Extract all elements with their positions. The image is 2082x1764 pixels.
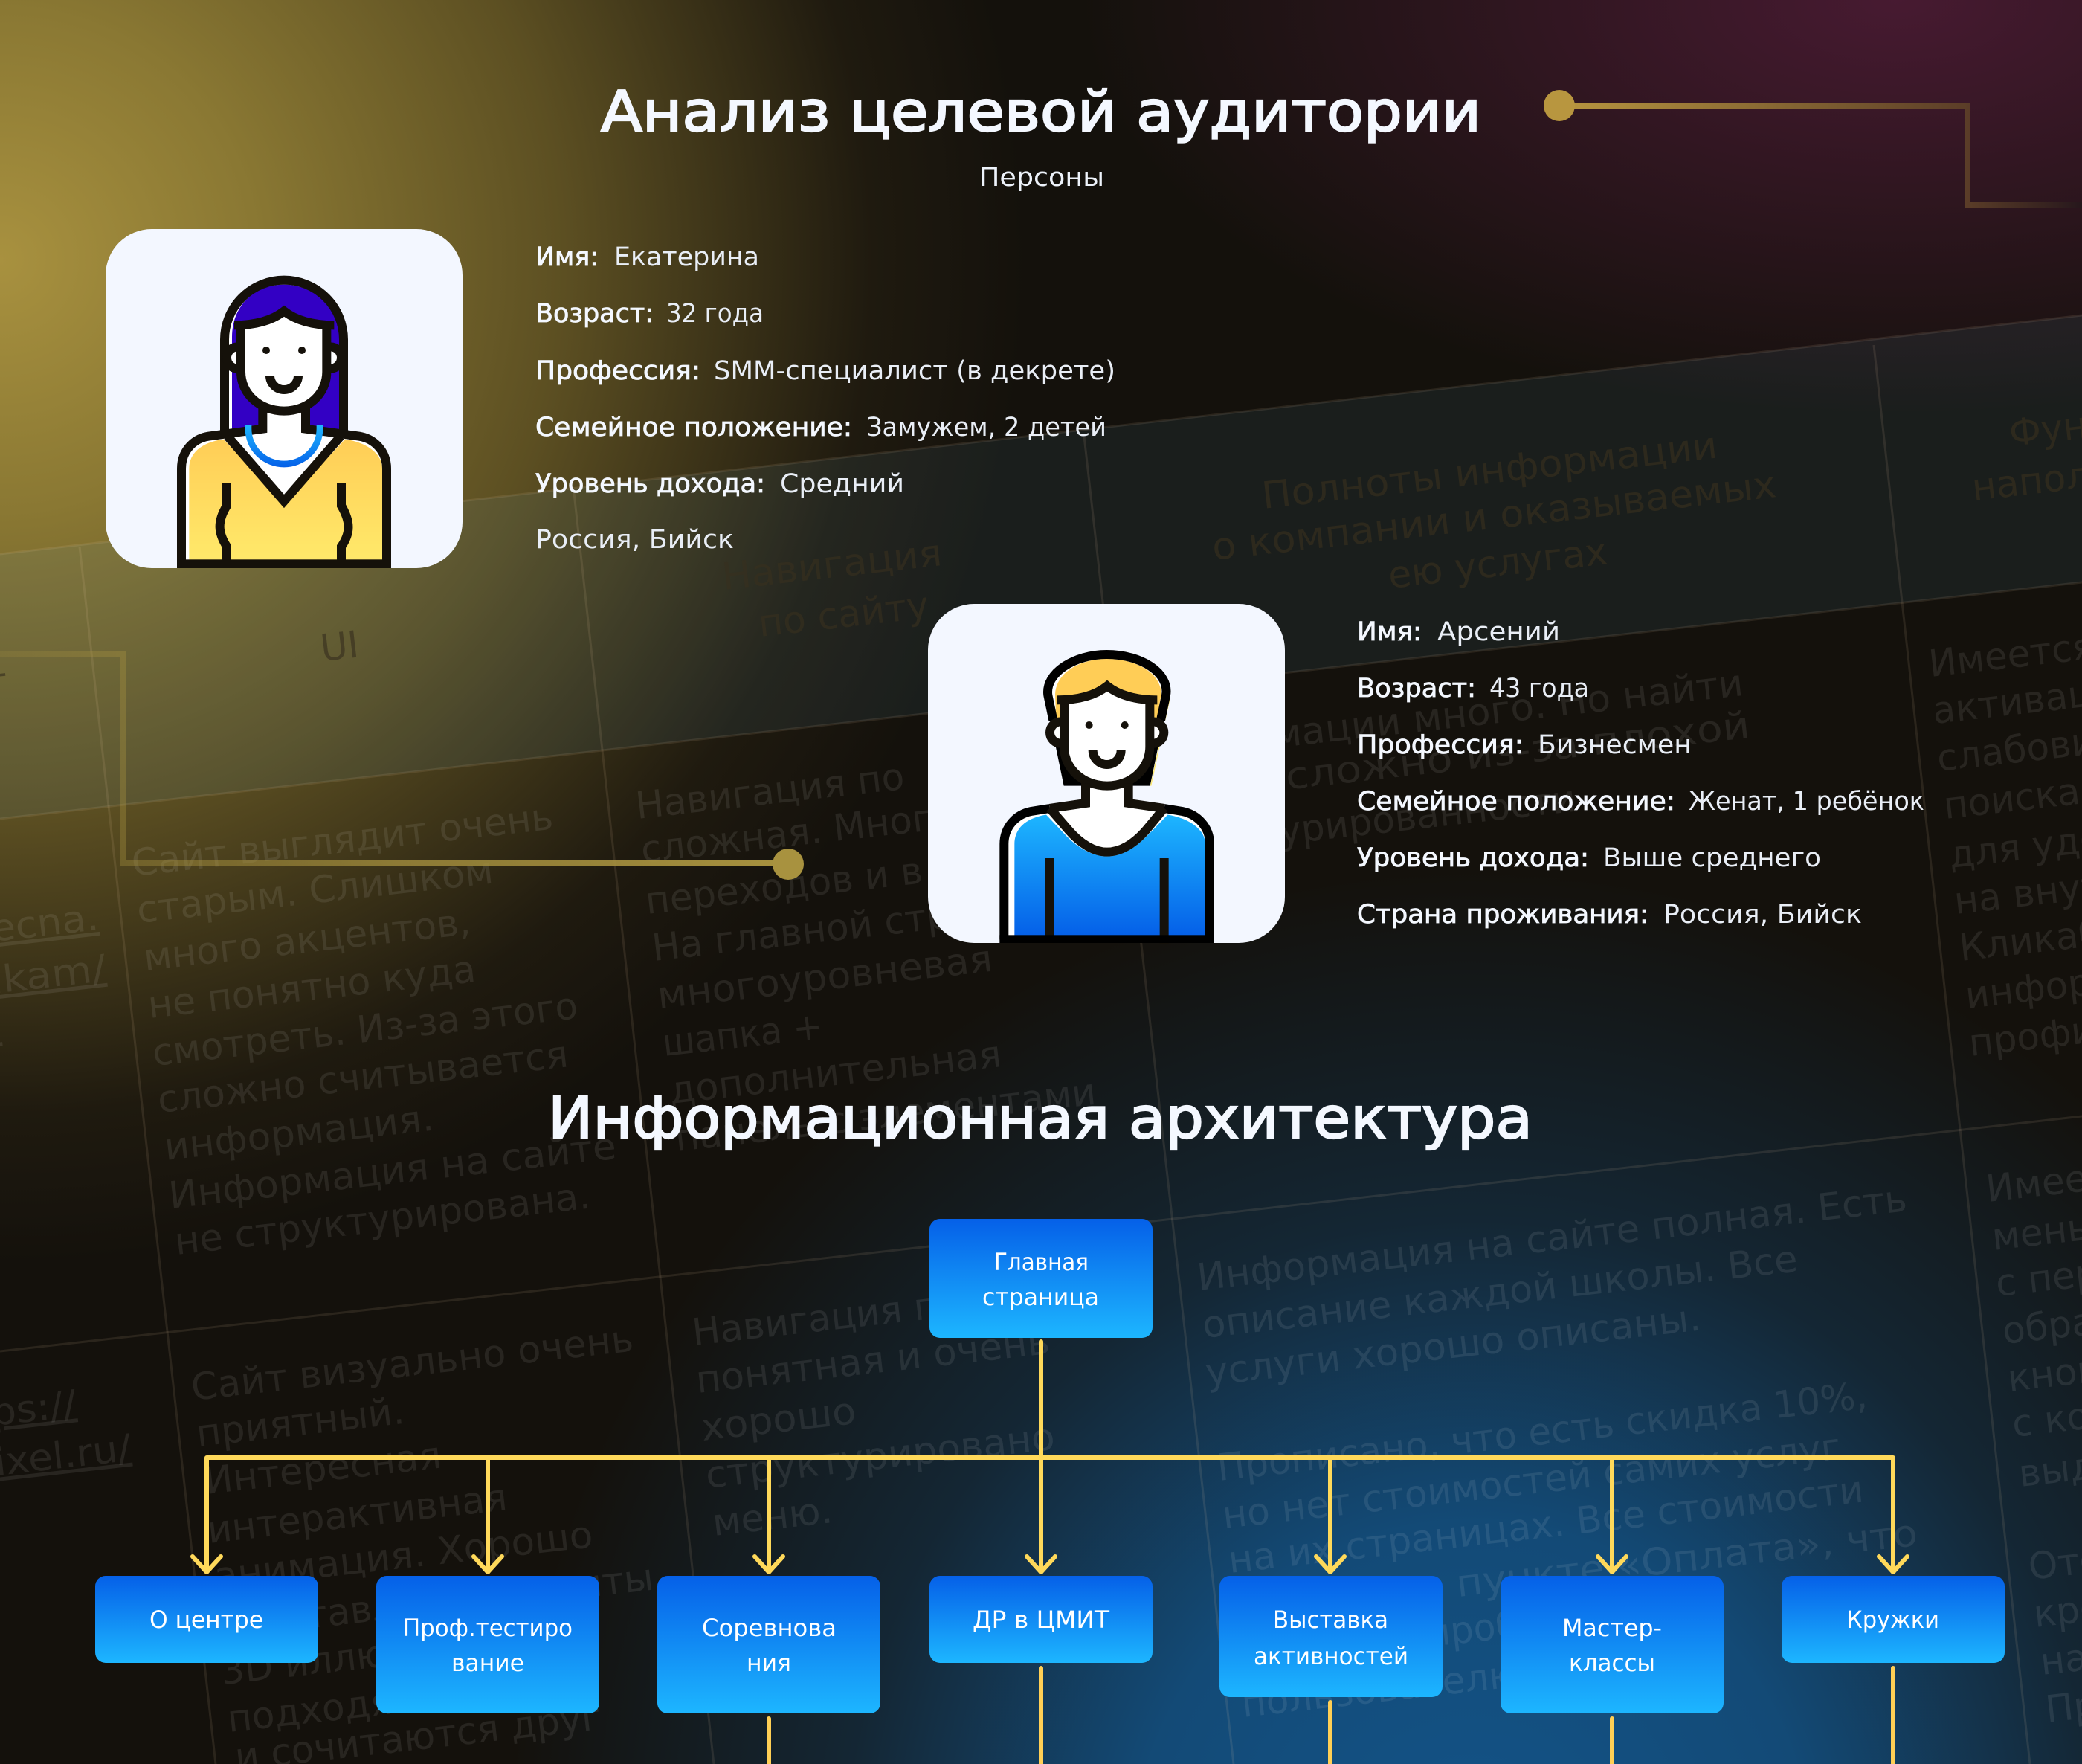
table row two texts: пользователю xyxy=(1240,1652,1522,1726)
flow box: ДР в ЦМИТ xyxy=(929,1576,1153,1663)
table row one texts: переходов и в xyxy=(643,849,925,923)
flow box: Мастер-классы: Мастер- xyxy=(1562,1614,1662,1642)
flow box: Кружки xyxy=(1782,1576,2005,1663)
icon: man avatar xyxy=(999,654,1214,944)
persona details: Арсений: Профессия: xyxy=(1357,730,1524,760)
table row two texts: подходят xyxy=(225,1677,416,1741)
table row one texts: структурированности xyxy=(1146,777,1578,868)
flow box: Главная страница: Главная xyxy=(994,1248,1089,1276)
table header texts: UI xyxy=(318,623,361,670)
table header texts: по сайту xyxy=(756,584,931,646)
table row two texts: Навигация по xyxy=(690,1281,963,1354)
table row one texts: Навигация по xyxy=(634,755,906,828)
persona details: Арсений: Россия, Бийск xyxy=(1663,900,1862,930)
persona details: Арсений: 43 года xyxy=(1489,674,1589,704)
flow box: Проф.тестирование xyxy=(376,1576,599,1713)
table row one texts: Информации много. Но найти xyxy=(1136,661,1745,772)
persona details: Арсений: Уровень дохода: xyxy=(1357,843,1589,873)
table row two texts: понятная и очень xyxy=(694,1319,1051,1402)
table row two texts: описание каждой школы. Все xyxy=(1200,1237,1799,1347)
table row one texts xyxy=(0,624,2082,1264)
table row two texts: сложно и проблематично xyxy=(1234,1580,1727,1677)
table row one texts: панель с элементами xyxy=(673,1070,1098,1160)
table row two texts: услуги хорошо описаны. xyxy=(1203,1296,1703,1394)
table row two texts: Сайт визуально очень xyxy=(189,1317,636,1409)
persona details: Екатерина: Екатерина xyxy=(614,242,759,272)
flow box: О центре: О центре xyxy=(149,1606,263,1634)
persona details: Екатерина: Уровень дохода: xyxy=(535,469,765,499)
flow box: Выставка активностей: активностей xyxy=(1254,1642,1408,1670)
subtitle: Персоны xyxy=(979,163,1104,193)
table row one texts: поиска xyxy=(1941,770,2082,828)
table row one texts: не структурирована. xyxy=(173,1174,593,1264)
persona details: Екатерина: Профессия: xyxy=(535,356,700,386)
table row one texts: Сайт выглядит очень xyxy=(129,795,555,885)
flow box: Выставка активностей xyxy=(1219,1576,1443,1697)
heading: information architecture: Информационная архитектура xyxy=(548,1086,1533,1152)
persona details: Арсений: Женат, 1 ребёнок xyxy=(1689,787,1924,817)
table row one texts: старым. Слишком xyxy=(135,849,495,932)
persona card: Екатерина xyxy=(106,229,463,568)
table header texts: Навигация xyxy=(720,531,944,599)
persona details: Екатерина: Имя: xyxy=(535,242,599,272)
persona details: Екатерина: 32 года xyxy=(666,299,764,329)
table row one texts: сложно считывается xyxy=(155,1032,570,1121)
flow box: Кружки: Кружки xyxy=(1846,1606,1939,1634)
table row two texts: расставлены акценты xyxy=(216,1556,656,1647)
table row one texts: дополнительная xyxy=(667,1032,1004,1113)
persona details: Арсений xyxy=(1357,617,1924,930)
table row one texts: очень сложно из-за плохой xyxy=(1141,704,1752,814)
title: Анализ целевой аудитории xyxy=(601,79,1481,144)
table row two texts: указаны в пункте «Оплата», что xyxy=(1230,1511,1920,1631)
persona details: Екатерина: Россия, Бийск xyxy=(535,525,734,555)
table row two texts: Информация на сайте полная. Есть xyxy=(1195,1176,1909,1299)
persona details: Арсений: Выше среднего xyxy=(1603,843,1821,873)
table row one texts: не понятно куда xyxy=(146,947,478,1027)
table row two texts: интерактивная xyxy=(205,1475,509,1552)
flow box: Главная страница: страница xyxy=(982,1283,1099,1311)
table row two texts: Интересная xyxy=(202,1434,443,1503)
table row one texts: много акцентов, xyxy=(141,900,473,979)
persona details: Екатерина: Возраст: xyxy=(535,299,654,329)
table row one texts: Информация на сайте xyxy=(167,1124,619,1217)
table row two texts xyxy=(0,1149,2082,1764)
flow box: ДР в ЦМИТ: ДР в ЦМИТ xyxy=(973,1606,1109,1634)
flow box: О центре xyxy=(95,1576,318,1663)
flow connectors and arrows xyxy=(193,1342,1907,1764)
flow box: Мастер-классы xyxy=(1501,1576,1724,1713)
persona details: Екатерина: Семейное положение: xyxy=(535,413,852,442)
table row one texts: смотреть. Из-за этого xyxy=(150,984,580,1075)
connector top right xyxy=(1544,90,2082,205)
table header texts xyxy=(0,385,2082,707)
table row two texts: хорошо xyxy=(699,1389,858,1449)
persona details: Екатерина: Замужем, 2 детей xyxy=(866,413,1106,442)
persona details: Арсений: Бизнесмен xyxy=(1538,730,1692,760)
flow box: Соревнования xyxy=(657,1576,880,1713)
flow box: Проф.тестирование: вание xyxy=(451,1649,524,1677)
flow box: Выставка активностей: Выставка xyxy=(1273,1606,1388,1634)
flow box: Проф.тестирование: Проф.тестиро xyxy=(403,1614,573,1642)
table row two texts: структурировано xyxy=(703,1415,1057,1497)
table row two texts: приятный. xyxy=(194,1389,407,1455)
table header texts: Полноты информации xyxy=(1260,424,1719,518)
table row one texts: На главной стр xyxy=(650,893,952,970)
persona details: Арсений: Возраст: xyxy=(1357,674,1476,704)
persona details: Арсений: Арсений xyxy=(1437,617,1560,647)
table row two texts: но нет стоимостей самих услуг xyxy=(1220,1425,1843,1537)
table header texts: ею услугах xyxy=(1386,529,1609,597)
persona details: Арсений: Имя: xyxy=(1357,617,1422,647)
flow box: Соревнования: ния xyxy=(747,1649,791,1677)
persona details: Арсений: Семейное положение: xyxy=(1357,787,1675,817)
table row one texts: шапка + xyxy=(660,1004,825,1065)
persona details: Екатерина: SMM-специалист (в декрете) xyxy=(714,356,1115,386)
table row one texts: сложная. Много xyxy=(639,794,956,872)
table row two texts: анимация. Хорошо xyxy=(212,1513,595,1598)
flow box: Мастер-классы: классы xyxy=(1569,1649,1655,1677)
table row two texts: 3D иллюстрации xyxy=(219,1614,550,1693)
table row one texts: информация. xyxy=(162,1096,436,1169)
flow box: Главная страница xyxy=(929,1219,1153,1338)
table header texts: о компании и оказываемых xyxy=(1210,463,1779,569)
table row two texts: меню. xyxy=(710,1488,834,1545)
flow box: Соревнования: Соревнова xyxy=(702,1614,837,1642)
connector left xyxy=(0,654,804,880)
persona details: Арсений: Страна проживания: xyxy=(1357,900,1648,930)
table row one texts: многоуровневая xyxy=(655,937,995,1017)
persona details: Екатерина xyxy=(535,242,1115,555)
persona card: Арсений xyxy=(928,604,1285,944)
table row two texts: Прописано, что есть скидка 10%, xyxy=(1215,1374,1869,1490)
icon: woman avatar xyxy=(177,280,391,568)
table row two texts: на их страницах. Все стоимости xyxy=(1226,1468,1866,1582)
persona details: Екатерина: Средний xyxy=(780,469,904,499)
